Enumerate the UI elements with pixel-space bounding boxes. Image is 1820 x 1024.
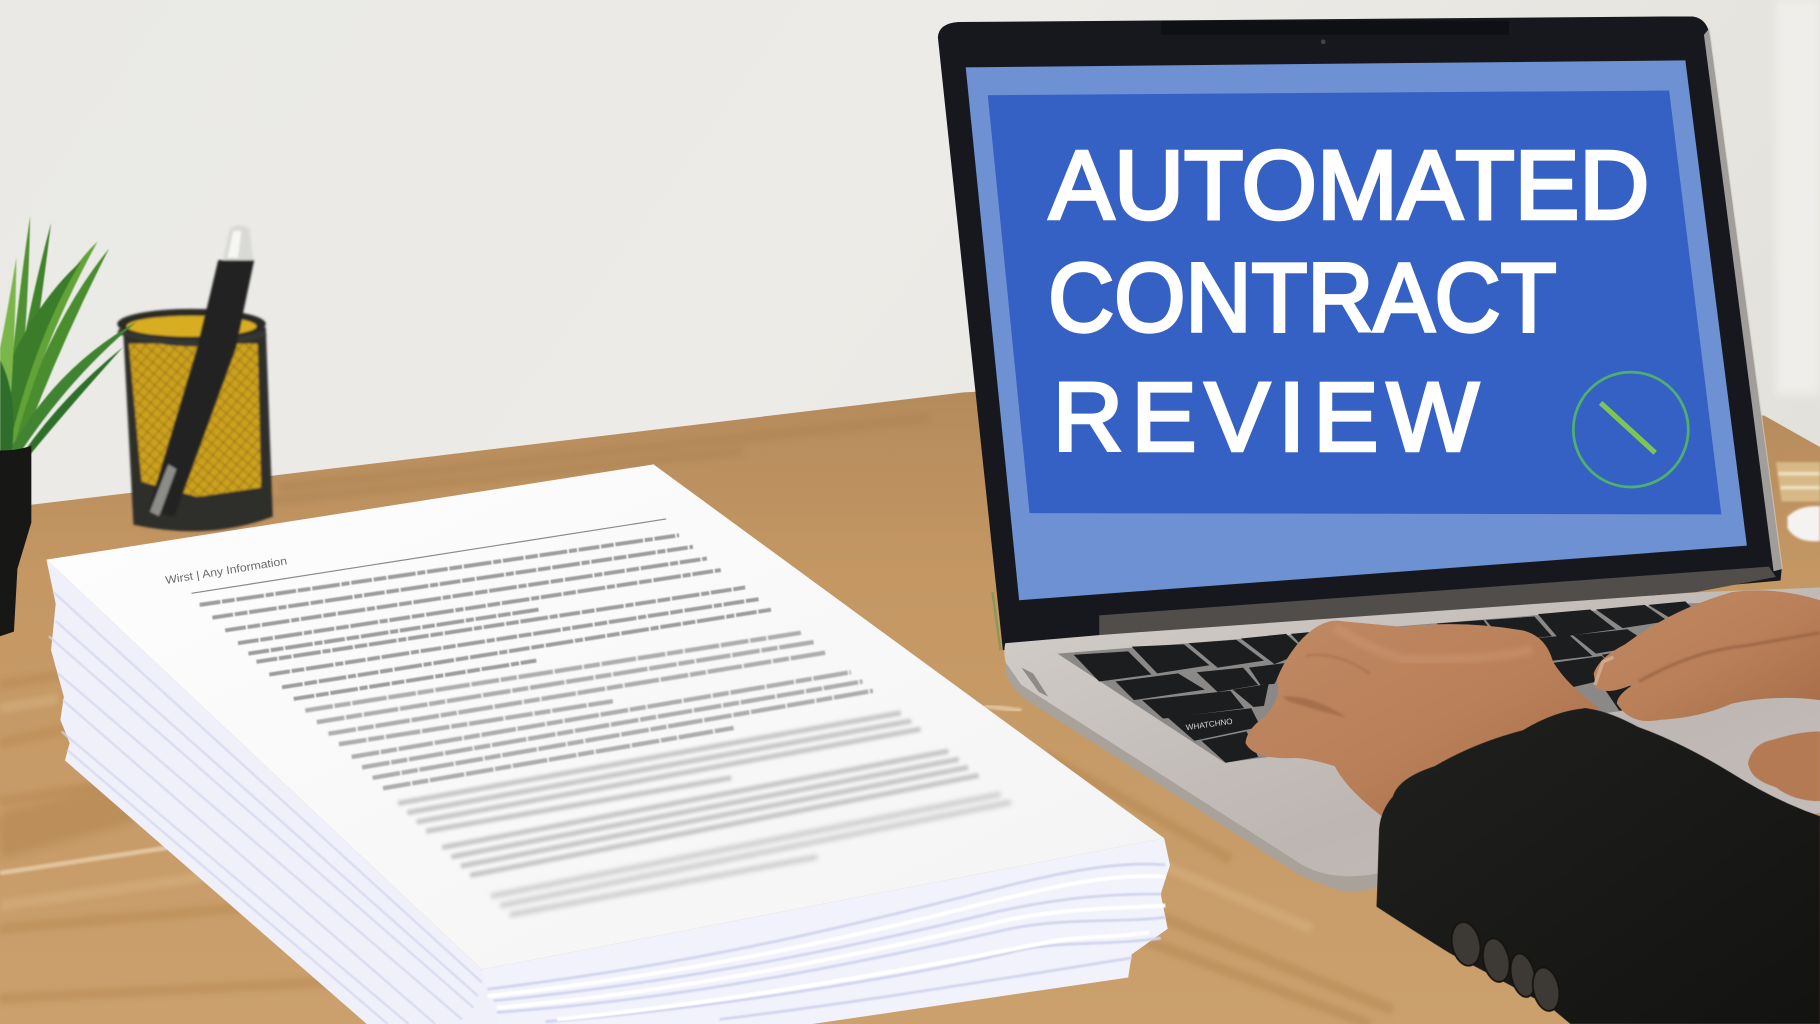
document rule	[192, 519, 666, 593]
document text lines, bottom	[491, 794, 1011, 915]
hinge band	[1099, 567, 1776, 640]
desk items at right edge	[1776, 462, 1820, 541]
laptop base	[1004, 587, 1820, 890]
stack left side	[46, 560, 505, 1024]
document text lines, lower	[398, 713, 978, 875]
keyboard well	[1057, 601, 1741, 763]
right hand	[1594, 590, 1820, 721]
laptop lid	[938, 16, 1782, 650]
document text lines, upper	[200, 535, 772, 699]
screen title: CONTRACT	[1048, 243, 1557, 352]
sleeve buttons	[1448, 919, 1563, 1013]
left hand	[1245, 621, 1599, 819]
pen	[149, 225, 254, 517]
screen title: REVIEW	[1053, 362, 1479, 471]
icon: green gauge circle	[1573, 372, 1688, 487]
plant pot	[0, 446, 31, 636]
thumb	[1748, 731, 1820, 801]
wooden desk	[0, 383, 1820, 1024]
pencil cup	[117, 225, 273, 531]
top sheet	[46, 464, 1164, 969]
keycap label: WHATCHNO	[1185, 717, 1233, 732]
screen title	[1048, 130, 1649, 471]
document text lines, middle	[305, 633, 873, 788]
blue title panel	[988, 91, 1721, 514]
screen	[966, 60, 1747, 600]
jacket sleeve	[1377, 708, 1820, 1024]
plant	[0, 216, 137, 636]
paper stack	[46, 464, 1170, 1024]
stack front side	[482, 838, 1170, 1024]
document heading: Wirst | Any Information	[165, 555, 288, 587]
laptop	[938, 16, 1820, 891]
screen title: AUTOMATED	[1049, 130, 1649, 239]
keyboard keys	[1074, 601, 1729, 763]
